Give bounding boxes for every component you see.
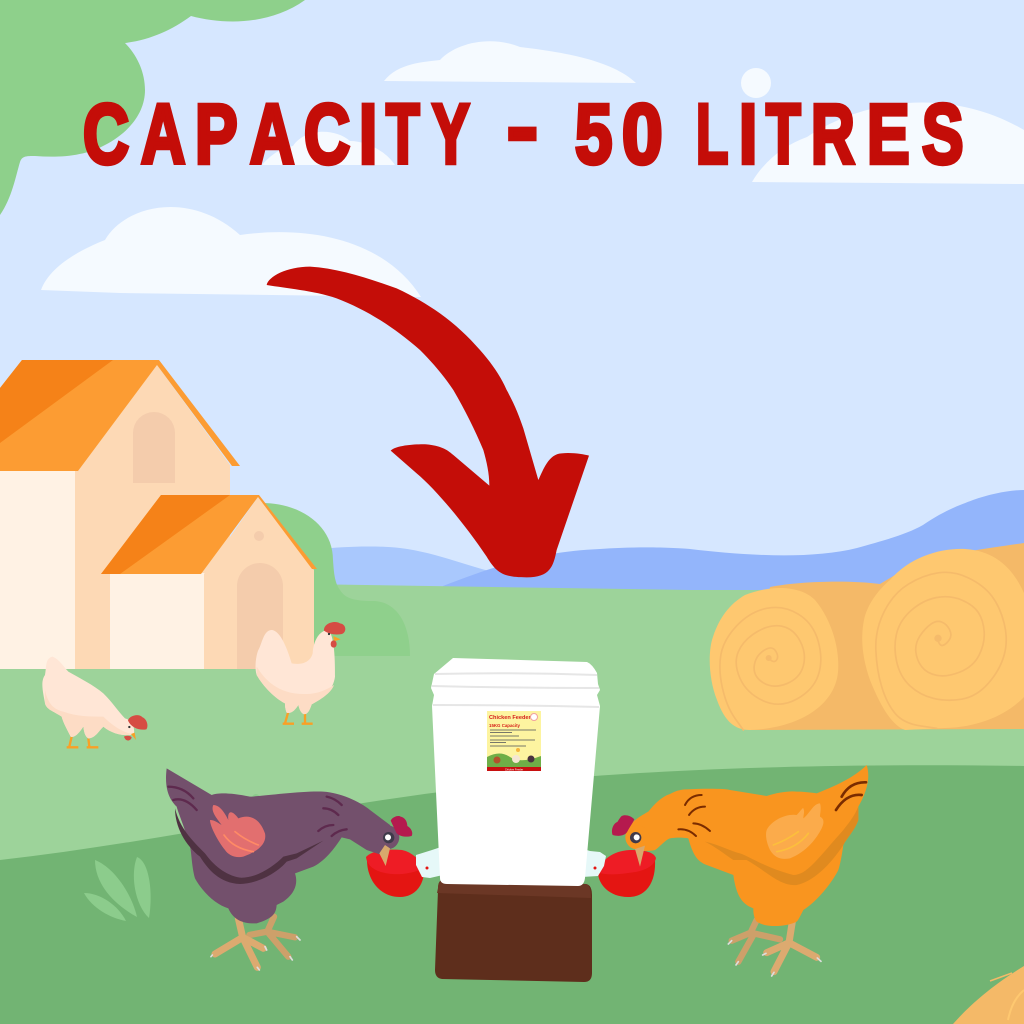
purple hen [166,768,412,970]
title: capacity: 5 [575,87,612,181]
small barn round vent [254,531,264,541]
thick red arrow [267,267,589,577]
right red cup [597,850,656,897]
large barn roof shaded panel [0,360,113,443]
purple hen body [166,768,393,923]
product label: Chicken Feeder [505,767,523,771]
dark green foreground field [0,765,1024,1024]
orange hen [612,765,868,976]
hay bale left face [710,588,838,730]
purple hen eye [383,832,394,843]
product label: Chicken Feeder [489,715,531,721]
title: capacity [83,80,963,181]
bucket body and lid [431,658,600,886]
title: capacity: C [83,87,129,181]
purple hen comb [391,816,412,837]
barn: small [101,495,317,669]
standing white hen [256,622,345,724]
tree canopy [0,0,305,215]
bush behind barn [262,503,410,656]
title: capacity: T [386,87,420,181]
title: capacity: Y [432,87,470,181]
large barn gable wall [75,365,230,669]
purple hen wing [210,805,265,857]
small barn front wall [110,573,205,669]
white bucket [431,658,600,886]
product label: 15KG Capacity [489,723,521,728]
orange hen dark band [705,807,858,885]
light green field [0,584,1024,1024]
hay bales [710,543,1024,730]
barn: large [0,360,240,669]
title: capacity: I [359,87,377,181]
plant leaves [84,794,262,921]
hay spirals [720,572,1006,730]
small barn roof shaded panel [101,495,230,574]
small barn gable wall [204,497,314,669]
distant hill: dark blue [443,490,1024,600]
title: capacity: 0 [622,87,663,181]
title: capacity: A [250,87,294,181]
small barn roof [101,495,317,574]
title: capacity: L [696,87,728,181]
title: capacity: A [140,87,185,181]
title: capacity: I [739,87,757,181]
brown base block [435,880,592,982]
purple hen beak [379,845,390,866]
title: capacity: R [811,87,855,181]
orange hen head [625,825,649,849]
title: capacity: T [766,87,801,181]
title: capacity: E [867,87,910,181]
cloud: top centre [384,41,636,83]
pecking white hen [42,657,147,747]
cloud: large left [41,207,421,297]
orange hen eye [630,832,641,843]
product label [487,711,541,771]
bucket lid rims [432,673,599,707]
hay pile bottom right [953,966,1024,1024]
large barn front wall [0,471,76,669]
large barn roof [0,360,240,471]
left nipple connector [416,847,443,878]
title: capacity: P [195,87,238,181]
cloud: right [752,102,1024,184]
purple hen dark band [175,808,323,884]
purple hen claws [211,937,300,970]
right nipple connector [580,848,606,877]
hay bale right face [862,549,1024,730]
purple hen feathers [168,787,347,852]
cloud: behind title [262,132,395,165]
orange hen claws [728,941,821,976]
orange hen feathers [678,782,866,852]
title: capacity: - [506,80,537,174]
sun disc [741,68,771,98]
small barn door [237,563,283,669]
purple hen head [375,825,399,849]
orange hen legs [732,920,817,972]
orange hen wing [766,803,823,859]
title: capacity: S [922,87,963,181]
orange hen body [625,765,868,926]
left red cup [366,850,424,897]
large barn window [133,412,175,483]
hay bale sides [750,543,1024,730]
orange hen comb [612,815,634,836]
purple hen legs [215,917,295,967]
distant hill: light blue [320,546,520,600]
title: capacity: C [304,87,350,181]
orange hen beak [635,846,645,867]
